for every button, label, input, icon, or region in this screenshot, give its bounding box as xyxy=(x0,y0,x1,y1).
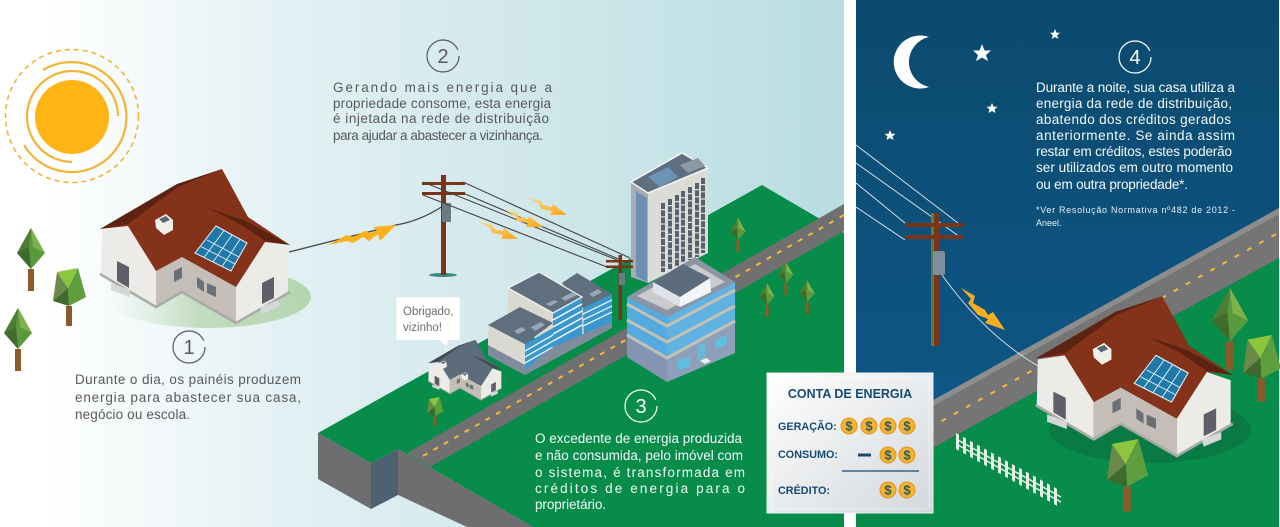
blue office building xyxy=(627,257,735,382)
number 2 xyxy=(427,40,459,72)
text: step 4: anteriormente. Se ainda assim xyxy=(1036,128,1235,143)
footnote xyxy=(1036,205,1235,228)
row: crédito: $ xyxy=(884,482,892,498)
energy bolts on wires xyxy=(478,197,567,239)
panel: night scene background xyxy=(856,0,1279,527)
mid-rise buildings xyxy=(488,272,612,375)
text: step 4: energia da rede de distribuição, xyxy=(1036,96,1232,111)
text: step 2: para ajudar a abastecer a vizinhança. xyxy=(333,128,543,143)
footnote: *Ver Resolução Normativa nº482 de 2012 - xyxy=(1036,205,1235,215)
text: step 2: Gerando mais energia que a xyxy=(333,80,552,95)
number 3: 3 xyxy=(635,396,647,418)
row: crédito xyxy=(778,482,915,498)
night utility pole and wires xyxy=(856,145,1038,366)
speech bubble: Obrigado, vizinho! xyxy=(396,297,460,347)
text: step 3: o sistema, é transformada em xyxy=(535,465,745,480)
row: consumo: $ xyxy=(903,448,911,462)
text: step 4: abatendo dos créditos gerados xyxy=(1036,112,1231,127)
text: step 4 xyxy=(1036,80,1235,192)
small grey-roof neighbour house xyxy=(428,340,502,400)
icon: trees left xyxy=(4,228,86,371)
row: geração: $ xyxy=(845,418,853,434)
number 4 xyxy=(1119,41,1151,73)
road: day scene xyxy=(407,204,844,467)
number 1: 1 xyxy=(183,337,195,359)
number 2: 2 xyxy=(437,46,449,68)
icon: trees night xyxy=(1107,288,1280,512)
tower building xyxy=(631,153,708,283)
ground block: neighbourhood xyxy=(318,185,844,527)
panel: day scene background xyxy=(0,0,844,527)
icon: sun xyxy=(6,50,138,182)
second utility pole xyxy=(606,255,633,320)
row: geração: $ xyxy=(884,418,892,434)
row: geração: $ xyxy=(865,418,873,434)
footnote: Aneel. xyxy=(1036,218,1062,228)
icon: stars xyxy=(884,29,1060,140)
text: step 2 xyxy=(333,80,552,143)
text: step 3: e não consumida, pelo imóvel com xyxy=(535,448,743,463)
text: step 1: energia para abastecer sua casa, xyxy=(75,390,301,405)
row: geração xyxy=(778,418,915,434)
card title: CONTA DE ENERGIA xyxy=(788,387,912,401)
text: step 1: Durante o dia, os painéis produzem xyxy=(75,372,301,387)
number 3 xyxy=(625,390,657,422)
energy bolt: night xyxy=(961,288,1005,330)
text: step 4: Durante a noite, sua casa utiliza a xyxy=(1036,80,1235,95)
wire from house to pole with energy bolt xyxy=(289,206,443,252)
row: crédito: CRÉDITO: xyxy=(778,484,830,497)
text: step 3: proprietário. xyxy=(535,497,606,512)
text: step 1: negócio ou escola. xyxy=(75,407,190,422)
text: step 2: propriedade consome, esta energia xyxy=(333,96,551,111)
house with solar panels xyxy=(100,169,311,328)
row: consumo xyxy=(778,447,915,463)
text: step 1 xyxy=(75,372,301,422)
icon: trees along road xyxy=(427,218,815,426)
text: step 4: restar em créditos, estes poderão xyxy=(1036,144,1232,159)
number 1 xyxy=(173,331,205,363)
picket fence xyxy=(956,433,1061,508)
row: consumo: CONSUMO: xyxy=(778,449,838,461)
row: consumo: $ xyxy=(884,448,892,462)
row: geração: GERAÇÃO: xyxy=(778,420,837,433)
night ground and road xyxy=(856,208,1279,527)
row: crédito: $ xyxy=(903,482,911,498)
card: conta de energia xyxy=(767,373,933,513)
utility pole and wires xyxy=(422,175,630,277)
text: step 2: é injetada na rede de distribuição xyxy=(333,111,549,126)
number 4: 4 xyxy=(1129,47,1141,69)
row: geração: $ xyxy=(903,418,911,434)
speech bubble: Obrigado, vizinho!: vizinho! xyxy=(403,322,442,334)
speech bubble: Obrigado, vizinho!: Obrigado, xyxy=(403,306,454,318)
icon: moon xyxy=(894,35,929,89)
text: step 3: O excedente de energia produzida xyxy=(535,431,742,446)
house at night xyxy=(1036,296,1233,456)
text: step 4: ou em outra propriedade*. xyxy=(1036,177,1188,192)
text: step 4: ser utilizados em outro momento xyxy=(1036,160,1233,175)
text: step 3 xyxy=(535,431,745,512)
text: step 3: créditos de energia para o xyxy=(535,481,745,496)
